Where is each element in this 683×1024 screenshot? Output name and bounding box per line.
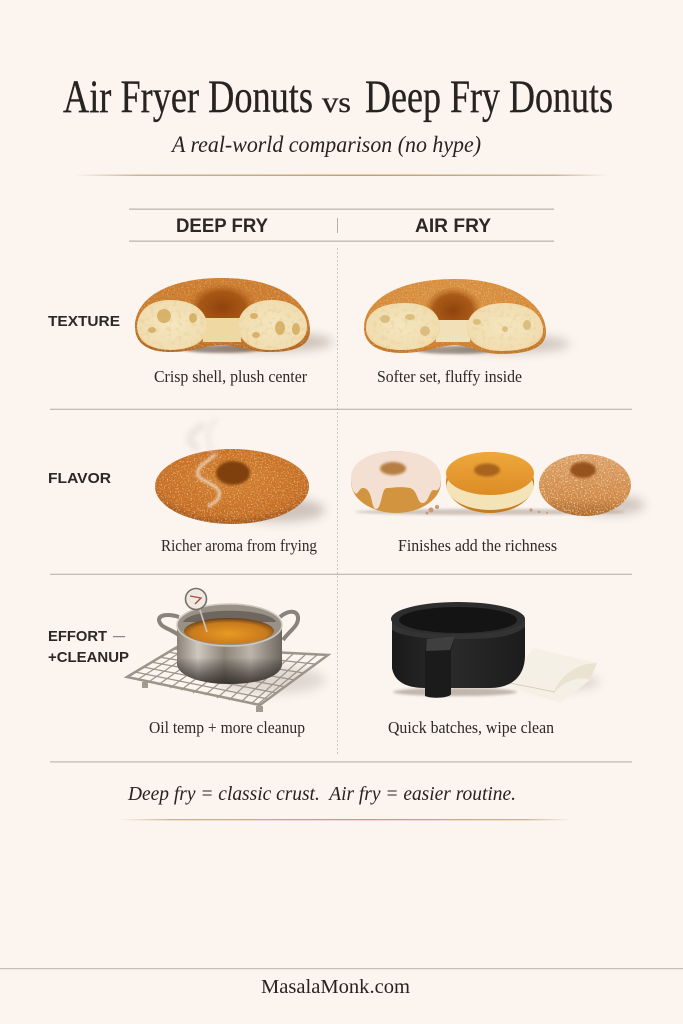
wire rack — [127, 647, 328, 705]
row: texture — [48, 278, 570, 386]
donut: cinnamon sugar — [539, 454, 631, 516]
column heading: air fry: AIR FRY — [415, 216, 491, 237]
label: flavor: FLAVOR — [48, 470, 111, 487]
image: pot with thermometer on wire rack — [127, 588, 328, 712]
title: Air Fryer Donuts — [63, 71, 313, 123]
pot body — [177, 625, 282, 684]
table header — [129, 208, 554, 242]
caption: air fry effort: Quick batches, wipe clean — [388, 718, 554, 737]
image: deep fried donut cut in half — [135, 278, 333, 353]
row: effort and cleanup — [48, 588, 600, 737]
footer: website: MasalaMonk.com — [261, 976, 410, 998]
image: deep fried donut with steam — [155, 420, 325, 524]
summary line: Deep fry = classic crust. Air fry = easier routine. — [127, 783, 516, 805]
label: effort + cleanup: EFFORT — [48, 628, 107, 645]
caption: deep fry flavor: Richer aroma from frying — [161, 536, 317, 555]
image: air fried donut cut in half — [364, 279, 570, 354]
label: texture: TEXTURE — [48, 313, 120, 330]
label: effort + cleanup: +CLEANUP — [48, 649, 129, 666]
caption: deep fry effort: Oil temp + more cleanup — [149, 718, 305, 737]
basket — [392, 620, 525, 688]
thermometer — [186, 588, 207, 632]
oil — [184, 618, 274, 644]
handle — [425, 636, 455, 698]
caption: air fry flavor: Finishes add the richness — [398, 536, 557, 555]
title: Deep Fry Donuts — [365, 71, 613, 123]
donut: glazed — [351, 451, 441, 513]
icon: steam — [190, 420, 219, 506]
row: flavor — [48, 420, 645, 555]
title: vs — [322, 86, 351, 119]
image: three finished donuts — [351, 451, 645, 516]
donut: golden — [446, 452, 534, 513]
caption: deep fry texture: Crisp shell, plush center — [154, 367, 307, 386]
label: effort + cleanup — [48, 628, 129, 666]
image: air fryer basket with towel — [391, 602, 600, 703]
column heading: deep fry: DEEP FRY — [176, 216, 268, 237]
towel — [507, 648, 597, 703]
handles — [159, 615, 180, 636]
title — [63, 71, 613, 123]
subtitle: A real-world comparison (no hype) — [170, 132, 481, 157]
caption: air fry texture: Softer set, fluffy inside — [377, 367, 522, 386]
label: effort + cleanup: — — [112, 628, 126, 643]
